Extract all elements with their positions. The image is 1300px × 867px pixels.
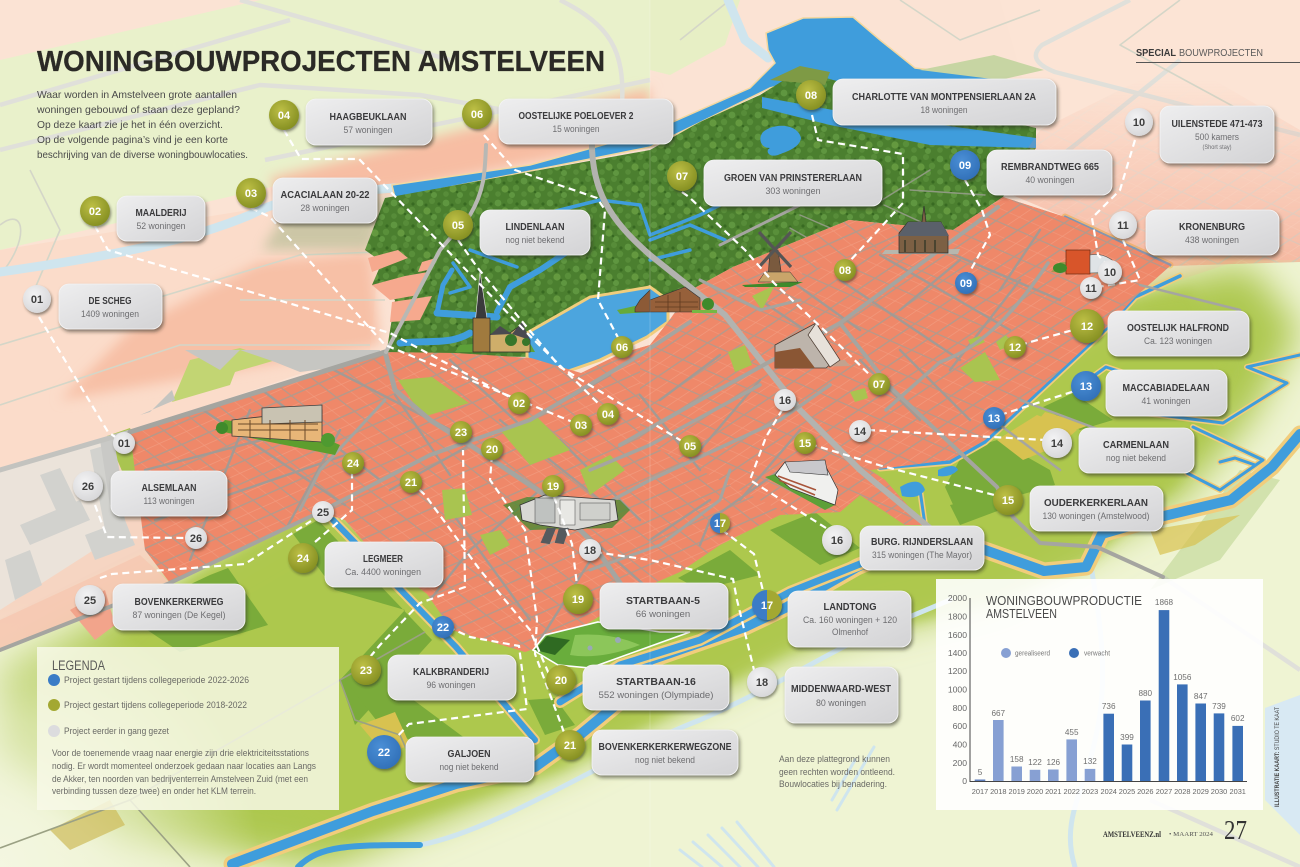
card 10: Uilenstede: (Short stay) — [1202, 145, 1232, 151]
bar values: 736 — [1102, 702, 1116, 711]
card 05: Lindenlaan: nog niet bekend — [506, 235, 564, 246]
card 12: Oostelijk Halfrond: 12 — [1081, 321, 1093, 333]
card 09: Rembrandtweg 665: 09 — [959, 160, 971, 172]
card 16: Burg. Rijnderslaan: 315 woningen (The Mayor) — [872, 550, 972, 561]
legend note: verbinding tussen deze twee) en onder het KLM terrein. — [52, 786, 256, 797]
x axis years — [972, 787, 1246, 796]
disclaimer text: geen rechten worden ontleend. — [779, 767, 895, 778]
card 20: Startbaan-16: 552 woningen (Olympiade) — [598, 690, 714, 701]
marker 14: 14 — [854, 426, 867, 438]
y axis: 400 — [953, 740, 967, 750]
card 05: Lindenlaan: LINDENLAAN — [506, 221, 564, 233]
card 03: Acacialaan: 03 — [245, 188, 257, 200]
card 24: Legmeer: 24 — [297, 553, 310, 565]
intro text: woningen gebouwd of staan deze gepland? — [36, 104, 240, 116]
y axis: 200 — [953, 758, 967, 768]
building: wooden hall at lake — [617, 287, 717, 314]
intro text: Waar worden in Amstelveen grote aantallen — [37, 89, 237, 101]
x axis years: 2017 — [972, 787, 988, 796]
card 12: Oostelijk Halfrond — [1070, 309, 1249, 356]
intro text — [36, 89, 248, 161]
card 01: De Scheg — [23, 284, 162, 329]
building: office complex west — [215, 405, 340, 455]
bar values: 667 — [991, 709, 1006, 718]
card 13: Maccabiadelaan — [1071, 370, 1227, 416]
y axis: 1800 — [948, 612, 967, 622]
chart legend: verwacht — [1084, 650, 1110, 658]
marker 25 — [312, 501, 334, 523]
marker 13: 13 — [988, 413, 1000, 425]
spine crease — [649, 0, 651, 867]
marker 09 — [955, 272, 977, 294]
marker 08 — [834, 259, 856, 281]
building: concrete triangular hall — [774, 323, 850, 368]
y axis: 800 — [953, 703, 967, 713]
disclaimer text: Bouwlocaties bij benadering. — [779, 779, 887, 790]
legend note — [52, 748, 316, 797]
building: hospital complex — [503, 495, 630, 543]
x axis years: 2023 — [1082, 787, 1098, 796]
marker 20 — [481, 438, 503, 460]
footer: magazine name and page number — [1103, 815, 1247, 845]
marker 26: 26 — [190, 533, 202, 545]
card 20: Startbaan-16: STARTBAAN-16 — [616, 676, 696, 688]
card 23: Kalkbranderij: 23 — [360, 665, 372, 677]
card 13: Maccabiadelaan: MACCABIADELAAN — [1122, 382, 1210, 394]
building: red cultural centre — [1051, 250, 1120, 274]
card 19: Startbaan-5: 19 — [572, 594, 584, 606]
marker 21: 21 — [405, 477, 417, 489]
card 03: Acacialaan: ACACIALAAN 20-22 — [280, 189, 370, 201]
card 26: Alsemlaan — [73, 471, 227, 516]
card 04: Haagbeuklaan — [269, 99, 432, 145]
card 07: Groen van Prinstererlaan — [667, 160, 882, 206]
forest: Amsterdamse Bos — [262, 66, 1036, 357]
card 20: Startbaan-16: 20 — [555, 675, 567, 687]
card 25: Bovenkerkerweg: 87 woningen (De Kegel) — [132, 610, 226, 621]
card 24: Legmeer: LEGMEER — [363, 553, 403, 565]
marker 02 — [508, 392, 530, 414]
main roads — [0, 135, 1240, 650]
marker 24: 24 — [347, 458, 360, 470]
card 24: Legmeer — [288, 542, 443, 587]
card 07: Groen van Prinstererlaan: 303 woningen — [766, 186, 820, 197]
canals — [232, 217, 1300, 864]
marker 03: 03 — [575, 420, 587, 432]
card 14: Carmenlaan: nog niet bekend — [1106, 453, 1166, 464]
x axis years: 2020 — [1027, 787, 1043, 796]
upper lake and river — [392, 17, 1040, 198]
card 01: De Scheg: 01 — [31, 294, 43, 306]
card 11: Kronenburg: 438 woningen — [1185, 235, 1239, 246]
marker 09: 09 — [960, 278, 972, 290]
card 14: Carmenlaan — [1042, 428, 1194, 473]
grey industrial area west — [0, 348, 380, 650]
footer: magazine name and page number: AMSTELVEENZ.nl — [1103, 829, 1161, 839]
card 25: Bovenkerkerweg: 25 — [84, 595, 96, 607]
card 06: Oostelijke Poeloever 2: 15 woningen — [552, 124, 600, 135]
card 22: Galjoen — [367, 735, 534, 782]
bar values: 455 — [1065, 728, 1079, 737]
legend note: nodig. Er wordt momenteel onderzoek gedaan naar locaties aan Langs — [52, 761, 316, 772]
y axis: 600 — [953, 721, 967, 731]
y axis — [948, 593, 970, 786]
card 05: Lindenlaan: 05 — [452, 220, 464, 232]
bar values: 1868 — [1155, 598, 1174, 607]
heading: top-right section label: SPECIAL — [1136, 47, 1177, 59]
bar values: 602 — [1231, 714, 1245, 723]
marker 18: 18 — [584, 545, 596, 557]
lime and grey wedge north of west road — [140, 348, 380, 415]
chart legend — [1001, 648, 1110, 658]
card 17: Landtong: Olmenhof — [832, 627, 868, 638]
card 16: Burg. Rijnderslaan: 16 — [831, 535, 843, 547]
card 13: Maccabiadelaan: 41 woningen — [1142, 396, 1190, 407]
y axis: 1200 — [948, 666, 967, 676]
card 12: Oostelijk Halfrond: Ca. 123 woningen — [1144, 336, 1212, 347]
card 15: Ouderkerkerlaan — [993, 485, 1163, 531]
marker 19 — [542, 475, 564, 497]
marker 26 — [185, 527, 207, 549]
route lines — [39, 115, 1140, 738]
card 14: Carmenlaan: 14 — [1051, 438, 1064, 450]
bar values: 158 — [1010, 755, 1024, 764]
card 06: Oostelijke Poeloever 2 — [462, 99, 673, 144]
illustration credit: ILLUSTRATIE KAART: STUDIO TE KAAT — [1274, 707, 1281, 807]
chart title — [986, 593, 1142, 621]
legend item: blue: Project gestart tijdens collegeperiode 2022-2026 — [64, 675, 249, 686]
lake — [527, 287, 668, 375]
panel: bar chart woningbouwproductie — [936, 579, 1263, 810]
bar values: 880 — [1138, 689, 1153, 698]
bar values — [978, 598, 1245, 777]
marker 20: 20 — [486, 444, 498, 456]
x axis years: 2022 — [1063, 787, 1080, 796]
marker 21 — [400, 471, 422, 493]
card 22: Galjoen: 22 — [378, 747, 390, 759]
card 01: De Scheg: 1409 woningen — [81, 309, 139, 320]
marker 04 — [597, 403, 619, 425]
y axis: 0 — [962, 776, 967, 786]
marker 17: 17 — [714, 518, 726, 530]
card 15: Ouderkerkerlaan: 15 — [1002, 495, 1014, 507]
card 19: Startbaan-5: 66 woningen — [636, 609, 690, 620]
card 15: Ouderkerkerlaan: 130 woningen (Amstelwood) — [1042, 511, 1150, 522]
card 26: Alsemlaan: ALSEMLAAN — [142, 482, 196, 494]
marker 22 — [432, 616, 454, 638]
x axis years: 2025 — [1119, 787, 1135, 796]
card 04: Haagbeuklaan: HAAGBEUKLAAN — [330, 111, 406, 123]
marker 13 — [983, 407, 1005, 429]
bars realised — [975, 720, 1095, 781]
marker 10: 10 — [1104, 267, 1116, 279]
marker 25: 25 — [317, 507, 329, 519]
marker 12 — [1004, 336, 1026, 358]
marker 05 — [679, 435, 701, 457]
salmon stepped plots left of bos road — [368, 250, 436, 322]
card 13: Maccabiadelaan: 13 — [1080, 381, 1092, 393]
card 22: Galjoen: nog niet bekend — [440, 762, 498, 773]
card 26: Alsemlaan: 26 — [82, 481, 94, 493]
marker 23 — [450, 421, 472, 443]
marker 10 — [1098, 260, 1122, 284]
marker 23: 23 — [455, 427, 467, 439]
card 07: Groen van Prinstererlaan: GROEN VAN PRINSTERERLAAN — [724, 172, 862, 184]
chart title: WONINGBOUWPRODUCTIE — [986, 593, 1142, 608]
card 21: Bovenkerkerkerwegzone — [555, 730, 738, 775]
x axis years: 2027 — [1156, 787, 1172, 796]
marker 08: 08 — [839, 265, 851, 277]
card 12: Oostelijk Halfrond: OOSTELIJK HALFROND — [1127, 322, 1229, 334]
marker 11 — [1080, 277, 1102, 299]
card 04: Haagbeuklaan: 04 — [278, 110, 291, 122]
pale forest patch above lake — [920, 55, 1044, 80]
legend note: de Akker, ten noorden van bedrijventerrein Amstelveen Zuid (met een — [52, 774, 308, 785]
y axis: 1400 — [948, 648, 967, 658]
card 11: Kronenburg: 11 — [1117, 220, 1129, 232]
card 10: Uilenstede: UILENSTEDE 471-473 — [1172, 118, 1263, 130]
intro text: Op de volgende pagina’s vind je een korte — [37, 134, 228, 146]
x axis years: 2030 — [1211, 787, 1227, 796]
x axis years: 2031 — [1229, 787, 1246, 796]
heading: top-right section label — [1136, 47, 1300, 63]
card 09: Rembrandtweg 665 — [950, 150, 1112, 195]
marker 15 — [794, 432, 816, 454]
footer: magazine name and page number: • MAART 2024 — [1169, 831, 1214, 838]
footer: magazine name and page number: 27 — [1224, 815, 1247, 845]
bar values: 132 — [1083, 757, 1097, 766]
card 19: Startbaan-5: STARTBAAN-5 — [626, 595, 700, 607]
card 17: Landtong: LANDTONG — [824, 601, 876, 613]
bar values: 5 — [978, 768, 983, 777]
card 16: Burg. Rijnderslaan: BURG. RIJNDERSLAAN — [871, 536, 973, 548]
marker 01 — [113, 432, 135, 454]
card 04: Haagbeuklaan: 57 woningen — [344, 125, 392, 136]
marker 15: 15 — [799, 438, 811, 450]
marker 06 — [611, 336, 633, 358]
bar values: 739 — [1212, 702, 1226, 711]
marker 24 — [342, 452, 364, 474]
bar values: 399 — [1120, 733, 1134, 742]
card 06: Oostelijke Poeloever 2: OOSTELIJKE POELOEVER 2 — [518, 110, 634, 122]
card 03: Acacialaan: 28 woningen — [300, 203, 350, 214]
x axis years: 2019 — [1008, 787, 1025, 796]
card 02: Maalderij: MAALDERIJ — [136, 207, 187, 219]
card 10: Uilenstede — [1125, 106, 1274, 163]
card 07: Groen van Prinstererlaan: 07 — [676, 171, 688, 183]
x axis years: 2028 — [1174, 787, 1191, 796]
bar values: 847 — [1194, 692, 1208, 701]
urban block pattern — [130, 60, 1300, 652]
marker 11: 11 — [1085, 283, 1097, 295]
card 03: Acacialaan — [236, 178, 377, 223]
bars expected — [1103, 610, 1243, 781]
card 18: Middenwaard-West — [747, 667, 898, 723]
legend item: olive: Project gestart tijdens collegeperiode 2018-2022 — [64, 700, 247, 711]
marker 02: 02 — [513, 398, 525, 410]
building: church — [455, 272, 535, 352]
card 25: Bovenkerkerweg: BOVENKERKERWEG — [134, 596, 224, 608]
card 10: Uilenstede: 10 — [1133, 117, 1145, 129]
card 15: Ouderkerkerlaan: OUDERKERKERLAAN — [1044, 497, 1148, 509]
y axis: 2000 — [948, 593, 967, 603]
card 11: Kronenburg — [1109, 210, 1279, 255]
card 21: Bovenkerkerkerwegzone: 21 — [564, 740, 576, 752]
card 18: Middenwaard-West: 80 woningen — [816, 698, 866, 709]
card 14: Carmenlaan: CARMENLAAN — [1103, 439, 1169, 451]
marker 16 — [774, 389, 796, 411]
card 08: Charlotte van Montpensierlaan: 18 woningen — [920, 105, 968, 116]
building: white flats — [765, 460, 842, 510]
card 18: Middenwaard-West: MIDDENWAARD-WEST — [791, 683, 892, 695]
bar values: 122 — [1028, 758, 1042, 767]
x axis years: 2029 — [1192, 787, 1209, 796]
card 17: Landtong — [752, 590, 911, 647]
title: WONINGBOUWPROJECTEN AMSTELVEEN — [37, 46, 605, 78]
card 16: Burg. Rijnderslaan — [822, 525, 984, 570]
marker 19: 19 — [547, 481, 559, 493]
card 08: Charlotte van Montpensierlaan — [796, 79, 1056, 125]
x axis years: 2018 — [990, 787, 1007, 796]
card 09: Rembrandtweg 665: REMBRANDTWEG 665 — [1001, 161, 1099, 173]
card 17: Landtong: 17 — [761, 600, 773, 612]
marker 04: 04 — [602, 409, 615, 421]
card 23: Kalkbranderij: KALKBRANDERIJ — [413, 666, 489, 678]
card 21: Bovenkerkerkerwegzone: nog niet bekend — [635, 755, 695, 766]
building: windmill — [742, 232, 803, 287]
card 25: Bovenkerkerweg — [75, 584, 245, 630]
marker 17 — [710, 513, 730, 533]
panel: legend — [37, 647, 339, 810]
card 20: Startbaan-16 — [546, 665, 729, 710]
x axis years: 2021 — [1045, 787, 1062, 796]
card 24: Legmeer: Ca. 4400 woningen — [345, 567, 421, 578]
y axis: 1000 — [948, 684, 967, 694]
marker 06: 06 — [616, 342, 628, 354]
legend item: grey: Project eerder in gang gezet — [64, 726, 169, 737]
marker 07: 07 — [873, 379, 885, 391]
card 26: Alsemlaan: 113 woningen — [144, 496, 194, 507]
card 10: Uilenstede: 500 kamers — [1195, 132, 1239, 143]
card 18: Middenwaard-West: 18 — [756, 677, 768, 689]
marker 05: 05 — [684, 441, 696, 453]
farmland — [0, 265, 1300, 867]
card 19: Startbaan-5 — [563, 583, 728, 629]
card 23: Kalkbranderij: 96 woningen — [426, 680, 476, 691]
card 17: Landtong: Ca. 160 woningen + 120 — [803, 615, 897, 626]
x axis years: 2026 — [1137, 787, 1154, 796]
bar values: 1056 — [1173, 673, 1192, 682]
card 02: Maalderij: 02 — [89, 206, 101, 218]
card 09: Rembrandtweg 665: 40 woningen — [1026, 175, 1074, 186]
intro text: Op deze kaart zie je het in één overzicht. — [37, 119, 223, 131]
marker 07 — [868, 373, 890, 395]
card 02: Maalderij — [80, 196, 205, 241]
card 02: Maalderij: 52 woningen — [136, 221, 186, 232]
intro text: beschrijving van de diverse woningbouwlocaties. — [37, 149, 248, 161]
disclaimer text: Aan deze plattegrond kunnen — [779, 754, 890, 765]
card 22: Galjoen: GALJOEN — [448, 748, 490, 760]
legend heading: LEGENDA — [52, 658, 105, 673]
park: Startbaan — [533, 622, 690, 668]
card 01: De Scheg: DE SCHEG — [88, 295, 132, 307]
disclaimer text — [779, 754, 895, 790]
bar values: 126 — [1046, 758, 1061, 767]
building: castle — [882, 206, 960, 254]
map markers — [113, 259, 1122, 638]
chart title: AMSTELVEEN — [986, 606, 1057, 621]
card 21: Bovenkerkerkerwegzone: BOVENKERKERKERWEGZONE — [598, 741, 732, 753]
card 23: Kalkbranderij — [351, 655, 516, 700]
marker 18 — [579, 539, 601, 561]
y axis: 1600 — [948, 630, 967, 640]
card 06: Oostelijke Poeloever 2: 06 — [471, 109, 483, 121]
card 05: Lindenlaan — [443, 210, 590, 255]
marker 16: 16 — [779, 395, 791, 407]
marker 14 — [849, 420, 871, 442]
x axis years: 2024 — [1100, 787, 1117, 796]
marker 03 — [570, 414, 592, 436]
card 11: Kronenburg: KRONENBURG — [1179, 221, 1245, 233]
marker 12: 12 — [1009, 342, 1021, 354]
marker 01: 01 — [118, 438, 130, 450]
legend note: Voor de toenemende vraag naar energie zijn drie elektriciteitsstations — [52, 748, 309, 759]
marker 22: 22 — [437, 622, 449, 634]
card 08: Charlotte van Montpensierlaan: 08 — [805, 90, 817, 102]
heading: top-right section label: BOUWPROJECTEN — [1179, 47, 1263, 59]
chart legend: gerealiseerd — [1015, 650, 1050, 658]
card 08: Charlotte van Montpensierlaan: CHARLOTTE VAN MONTPENSIERLAAN 2A — [852, 91, 1036, 103]
